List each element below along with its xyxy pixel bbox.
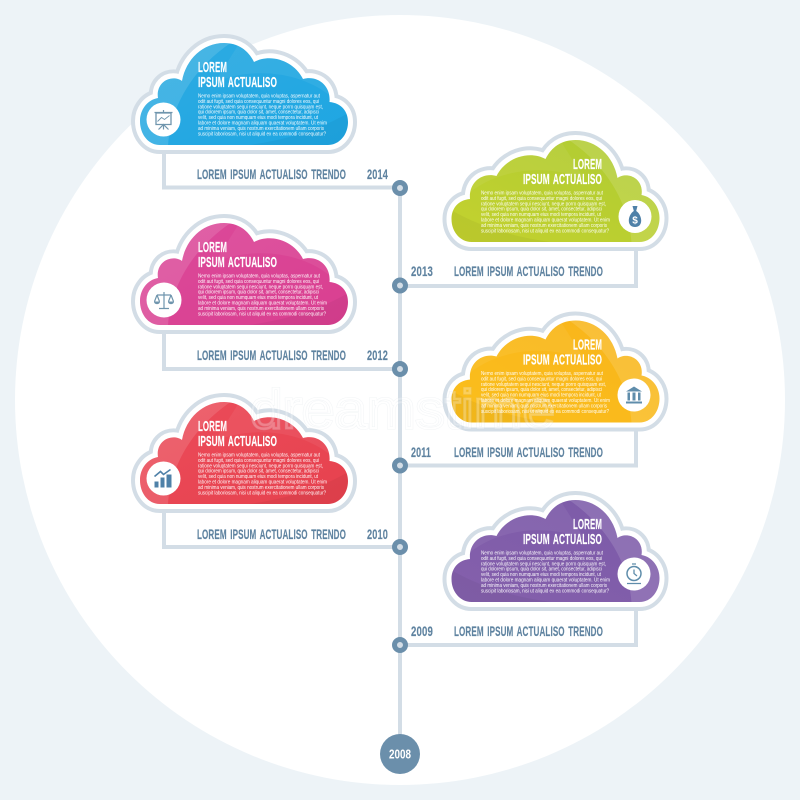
text block: pink cloud: IPSUM ACTUALISO	[198, 254, 277, 271]
text block: green cloud: ad minima veniam, quis nostrum exercitationem ullam corporis	[481, 223, 607, 229]
text block: blue cloud: odit aut fugit, sed quia consequuntur magni dolores eos, qui	[198, 99, 319, 105]
cloud: 2011 yellow	[450, 308, 670, 424]
text block: green cloud: labore et dolore magnam aliquam quaerat voluptatem. Ut enim	[481, 218, 610, 224]
text block: purple cloud: IPSUM ACTUALISO	[523, 531, 602, 548]
text block: green cloud: LOREM	[573, 156, 602, 173]
text block: red cloud: suscipit laboriosam, nisi ut aliquid ex ea commodi consequatur?	[198, 490, 326, 496]
text block: red cloud: IPSUM ACTUALISO	[198, 433, 277, 450]
text block: yellow cloud: Nemo enim ipsam voluptatem, quia voluptas, aspernatur aut	[481, 371, 604, 377]
icon: money bag: $	[632, 216, 638, 226]
timeline label: 2013: LOREM IPSUM ACTUALISO TRENDO	[454, 264, 603, 279]
text block: blue cloud: LOREM	[198, 59, 227, 76]
cloud: 2010 red	[130, 389, 350, 505]
end node: 2008: 2008	[389, 746, 411, 762]
text block: red cloud: odit aut fugit, sed quia consequuntur magni dolores eos, qui	[198, 458, 319, 464]
text block: yellow cloud: qui dolorem ipsum, quia dolor sit, amet, consectetur, adipisci	[481, 387, 602, 393]
text block: purple cloud: labore et dolore magnam aliquam quaerat voluptatem. Ut enim	[481, 578, 610, 584]
text block: pink cloud: qui dolorem ipsum, quia dolor sit, amet, consectetur, adipisci	[198, 290, 319, 296]
cloud: 2013 green	[450, 127, 670, 243]
text block: blue cloud: IPSUM ACTUALISO	[198, 74, 277, 91]
cloud: 2014 blue	[130, 30, 350, 146]
text block: blue cloud: suscipit laboriosam, nisi ut aliquid ex ea commodi consequatur?	[198, 131, 326, 137]
icon: presentation board	[146, 102, 180, 136]
text block: purple cloud: Nemo enim ipsam voluptatem, quia voluptas, aspernatur aut	[481, 550, 604, 556]
text block: yellow cloud: odit aut fugit, sed quia consequuntur magni dolores eos, qui	[481, 376, 602, 382]
timeline label: 2009: LOREM IPSUM ACTUALISO TRENDO	[454, 624, 603, 639]
timeline label: 2013	[411, 264, 603, 279]
text block: green cloud	[481, 156, 610, 234]
text block: pink cloud: labore et dolore magnam aliquam quaerat voluptatem. Ut enim	[198, 300, 327, 306]
text block: red cloud: LOREM	[198, 418, 227, 435]
text block: green cloud: Nemo enim ipsam voluptatem, quia voluptas, aspernatur aut	[481, 190, 604, 196]
text block: yellow cloud	[481, 336, 610, 415]
text block: yellow cloud: IPSUM ACTUALISO	[523, 352, 602, 368]
text block: blue cloud: ratione voluptatem sequi nesciunt, neque porro quisquam est,	[198, 104, 323, 110]
text block: red cloud: ratione voluptatem sequi nesciunt, neque porro quisquam est,	[198, 463, 323, 469]
text block: red cloud: qui dolorem ipsum, quia dolor sit, amet, consectetur, adipisci	[198, 469, 319, 475]
text block: green cloud: ratione voluptatem sequi nesciunt, neque porro quisquam est,	[481, 201, 606, 207]
text block: blue cloud: qui dolorem ipsum, quia dolor sit, amet, consectetur, adipisci	[198, 110, 319, 116]
text block: pink cloud	[198, 239, 327, 317]
timeline label: 2012: LOREM IPSUM ACTUALISO TRENDO	[197, 348, 346, 363]
text block: yellow cloud: suscipit laboriosam, nisi ut aliquid ex ea commodi consequatur?	[481, 409, 609, 415]
text block: yellow cloud: labore et dolore magnam aliquam quaerat voluptatem. Ut enim	[481, 398, 610, 404]
timeline connectors	[164, 150, 636, 740]
text block: green cloud: qui dolorem ipsum, quia dolor sit, amet, consectetur, adipisci	[481, 207, 602, 213]
watermark: dreamstime	[250, 378, 555, 440]
text block: green cloud: suscipit laboriosam, nisi ut aliquid ex ea commodi consequatur?	[481, 228, 609, 234]
cloud: 2012 pink	[130, 210, 350, 326]
text block: red cloud: labore et dolore magnam aliquam quaerat voluptatem. Ut enim	[198, 480, 327, 486]
text block: blue cloud	[198, 59, 327, 137]
timeline label: 2011: LOREM IPSUM ACTUALISO TRENDO	[454, 445, 603, 460]
text block: pink cloud: odit aut fugit, sed quia consequuntur magni dolores eos, qui	[198, 279, 319, 285]
icon: stopwatch	[618, 558, 650, 590]
text block: purple cloud: qui dolorem ipsum, quia dolor sit, amet, consectetur, adipisci	[481, 567, 602, 573]
icon: money bag	[618, 200, 652, 233]
watermark: dreamstime	[250, 378, 555, 440]
text block: green cloud: odit aut fugit, sed quia consequuntur magni dolores eos, qui	[481, 196, 602, 202]
text block: red cloud: velit, sed quia non numquam eius modi tempora incidunt, ut	[198, 474, 319, 480]
text block: green cloud: IPSUM ACTUALISO	[523, 171, 602, 188]
text block: pink cloud: velit, sed quia non numquam eius modi tempora incidunt, ut	[198, 295, 319, 301]
text block: purple cloud: velit, sed quia non numquam eius modi tempora incidunt, ut	[481, 572, 602, 578]
timeline label: 2014: LOREM IPSUM ACTUALISO TRENDO	[197, 167, 346, 182]
timeline label: 2010: LOREM IPSUM ACTUALISO TRENDO	[197, 527, 346, 542]
text block: pink cloud: suscipit laboriosam, nisi ut aliquid ex ea commodi consequatur?	[198, 311, 326, 317]
text block: green cloud: velit, sed quia non numquam eius modi tempora incidunt, ut	[481, 212, 602, 218]
text block: blue cloud: velit, sed quia non numquam eius modi tempora incidunt, ut	[198, 115, 319, 121]
icon: growth chart	[146, 462, 180, 496]
cloud: 2009 purple	[450, 487, 670, 603]
text block: yellow cloud: LOREM	[573, 336, 602, 354]
timeline label: 2010: 2010	[367, 527, 388, 542]
timeline label: 2011	[411, 445, 603, 460]
text block: blue cloud: Nemo enim ipsam voluptatem, quia voluptas, aspernatur aut	[198, 94, 321, 100]
timeline label: 2009: 2009	[411, 624, 433, 639]
text block: yellow cloud: ratione voluptatem sequi nesciunt, neque porro quisquam est,	[481, 382, 606, 388]
timeline label: 2012: 2012	[367, 348, 388, 363]
icon: bank building	[618, 378, 650, 412]
text block: purple cloud: ad minima veniam, quis nostrum exercitationem ullam corporis	[481, 583, 607, 589]
text block: pink cloud: Nemo enim ipsam voluptatem, quia voluptas, aspernatur aut	[198, 274, 321, 280]
text block: blue cloud: labore et dolore magnam aliquam quaerat voluptatem. Ut enim	[198, 120, 327, 126]
timeline nodes	[394, 182, 406, 650]
text block: purple cloud: ratione voluptatem sequi nesciunt, neque porro quisquam est,	[481, 561, 606, 567]
timeline label: 2009	[411, 624, 603, 639]
end node: 2008	[380, 734, 420, 774]
timeline label: 2011: 2011	[411, 445, 431, 460]
text block: purple cloud	[481, 516, 610, 594]
text block: purple cloud: LOREM	[573, 516, 602, 533]
text block: yellow cloud: ad minima veniam, quis nostrum exercitationem ullam corporis	[481, 403, 607, 409]
text block: pink cloud: ad minima veniam, quis nostrum exercitationem ullam corporis	[198, 306, 324, 312]
text block: red cloud	[198, 418, 327, 496]
text block: pink cloud: ratione voluptatem sequi nesciunt, neque porro quisquam est,	[198, 284, 323, 290]
timeline label: 2014: 2014	[367, 167, 388, 182]
text block: red cloud: Nemo enim ipsam voluptatem, quia voluptas, aspernatur aut	[198, 452, 321, 458]
text block: yellow cloud: velit, sed quia non numquam eius modi tempora incidunt, ut	[481, 393, 602, 399]
text block: purple cloud: odit aut fugit, sed quia consequuntur magni dolores eos, qui	[481, 556, 602, 562]
text block: red cloud: ad minima veniam, quis nostrum exercitationem ullam corporis	[198, 485, 324, 491]
text block: pink cloud: LOREM	[198, 239, 227, 256]
text block: purple cloud: suscipit laboriosam, nisi ut aliquid ex ea commodi consequatur?	[481, 588, 609, 594]
timeline label: 2013: 2013	[411, 264, 433, 279]
text block: blue cloud: ad minima veniam, quis nostrum exercitationem ullam corporis	[198, 126, 324, 132]
icon: scales	[146, 282, 182, 318]
